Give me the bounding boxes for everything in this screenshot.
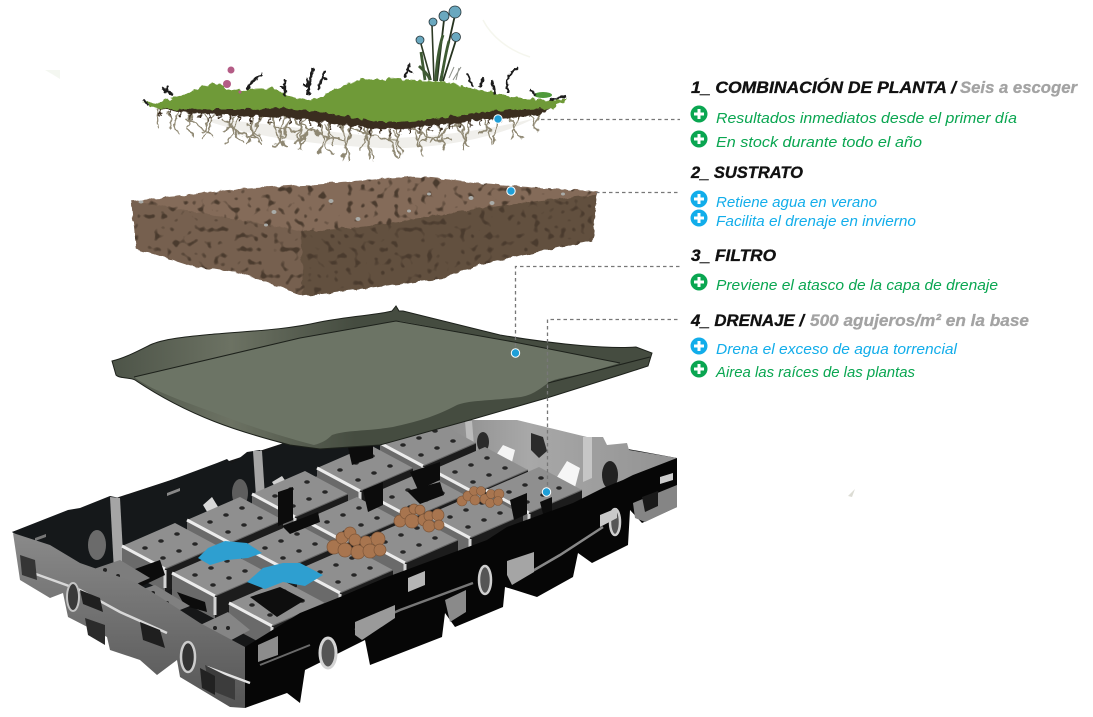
heading 3: 3_ FILTRO [691,246,776,265]
crate pits between tiles [135,432,552,612]
water blue shape 1 [198,541,262,565]
fabric outline strokes [134,321,650,383]
side rails and tabs [20,473,677,700]
layer 3: filter fabric [112,306,652,449]
benefit text: Resultados inmediatos desde el primer día [716,110,1017,127]
crate square opening [250,587,305,617]
subheading 1: Seis a escoger [960,78,1078,97]
heading 2: 2_ SUSTRATO [690,163,803,182]
crate interior base [12,420,677,660]
twigs [143,63,566,105]
pink flowers [223,66,242,94]
faint speck right [848,489,855,497]
crate fins [203,430,580,530]
benefit text: Airea las raíces de las plantas [715,364,915,381]
blue flowers [416,6,461,44]
benefit text: Retiene agua en verano [716,194,877,211]
pebbles cluster 1 [327,527,386,559]
crate front right black face [245,458,677,708]
icon: plus green [690,130,708,148]
marker dots [494,115,551,496]
benefit text: Drena el exceso de agua torrencial [716,341,958,358]
fabric underside fold [112,306,652,449]
text: section 4 [690,311,1029,381]
layer 4: drainage crate [12,420,677,708]
crate tile grid [122,420,582,649]
pebbles cluster 2 [394,504,444,532]
grass top [143,78,567,122]
soil pale stones [138,192,565,226]
grass bright patch [534,92,552,98]
benefit text: Previene el atasco de la capa de drenaje [716,277,998,294]
subheading 4: 500 agujeros/m² en la base [810,311,1029,330]
faint arc [483,20,530,57]
pebbles cluster 3 [457,486,504,508]
icon: plus blue [690,190,708,208]
crate back-left wall [12,425,400,590]
text: section 1 [690,78,1078,151]
heading 1: 1_ COMBINACIÓN DE PLANTA / [691,78,958,97]
icon: plus green [690,360,708,378]
heading 4: 4_ DRENAJE / [690,311,806,330]
soil block [132,177,596,295]
crate floor grey [150,450,555,625]
icon: plus green [690,274,708,290]
icon: plus blue [690,210,708,226]
root mat hairs [160,108,540,136]
fabric flat top [134,321,620,445]
benefit text: En stock durante todo el año [716,134,922,151]
crate back-right wall [380,420,677,510]
plant stems [419,15,461,81]
crate left side face [13,533,245,708]
benefit text: Facilita el drenaje en invierno [716,213,916,230]
icon: plus green [690,106,708,122]
text: section 3 [690,246,998,294]
text: section 2 [690,163,916,230]
leader lines [516,120,680,492]
faint speck top left [45,70,60,79]
roots [156,108,542,161]
root mat pale shade [200,118,535,148]
root mat [150,106,552,129]
back wall posts and holes [35,421,618,572]
icon: plus blue [690,338,708,354]
layer 2: substrate soil [132,177,596,295]
crate rim tiles [85,560,250,644]
water blue shape 2 [247,563,323,589]
layer 1: plants [143,6,567,161]
